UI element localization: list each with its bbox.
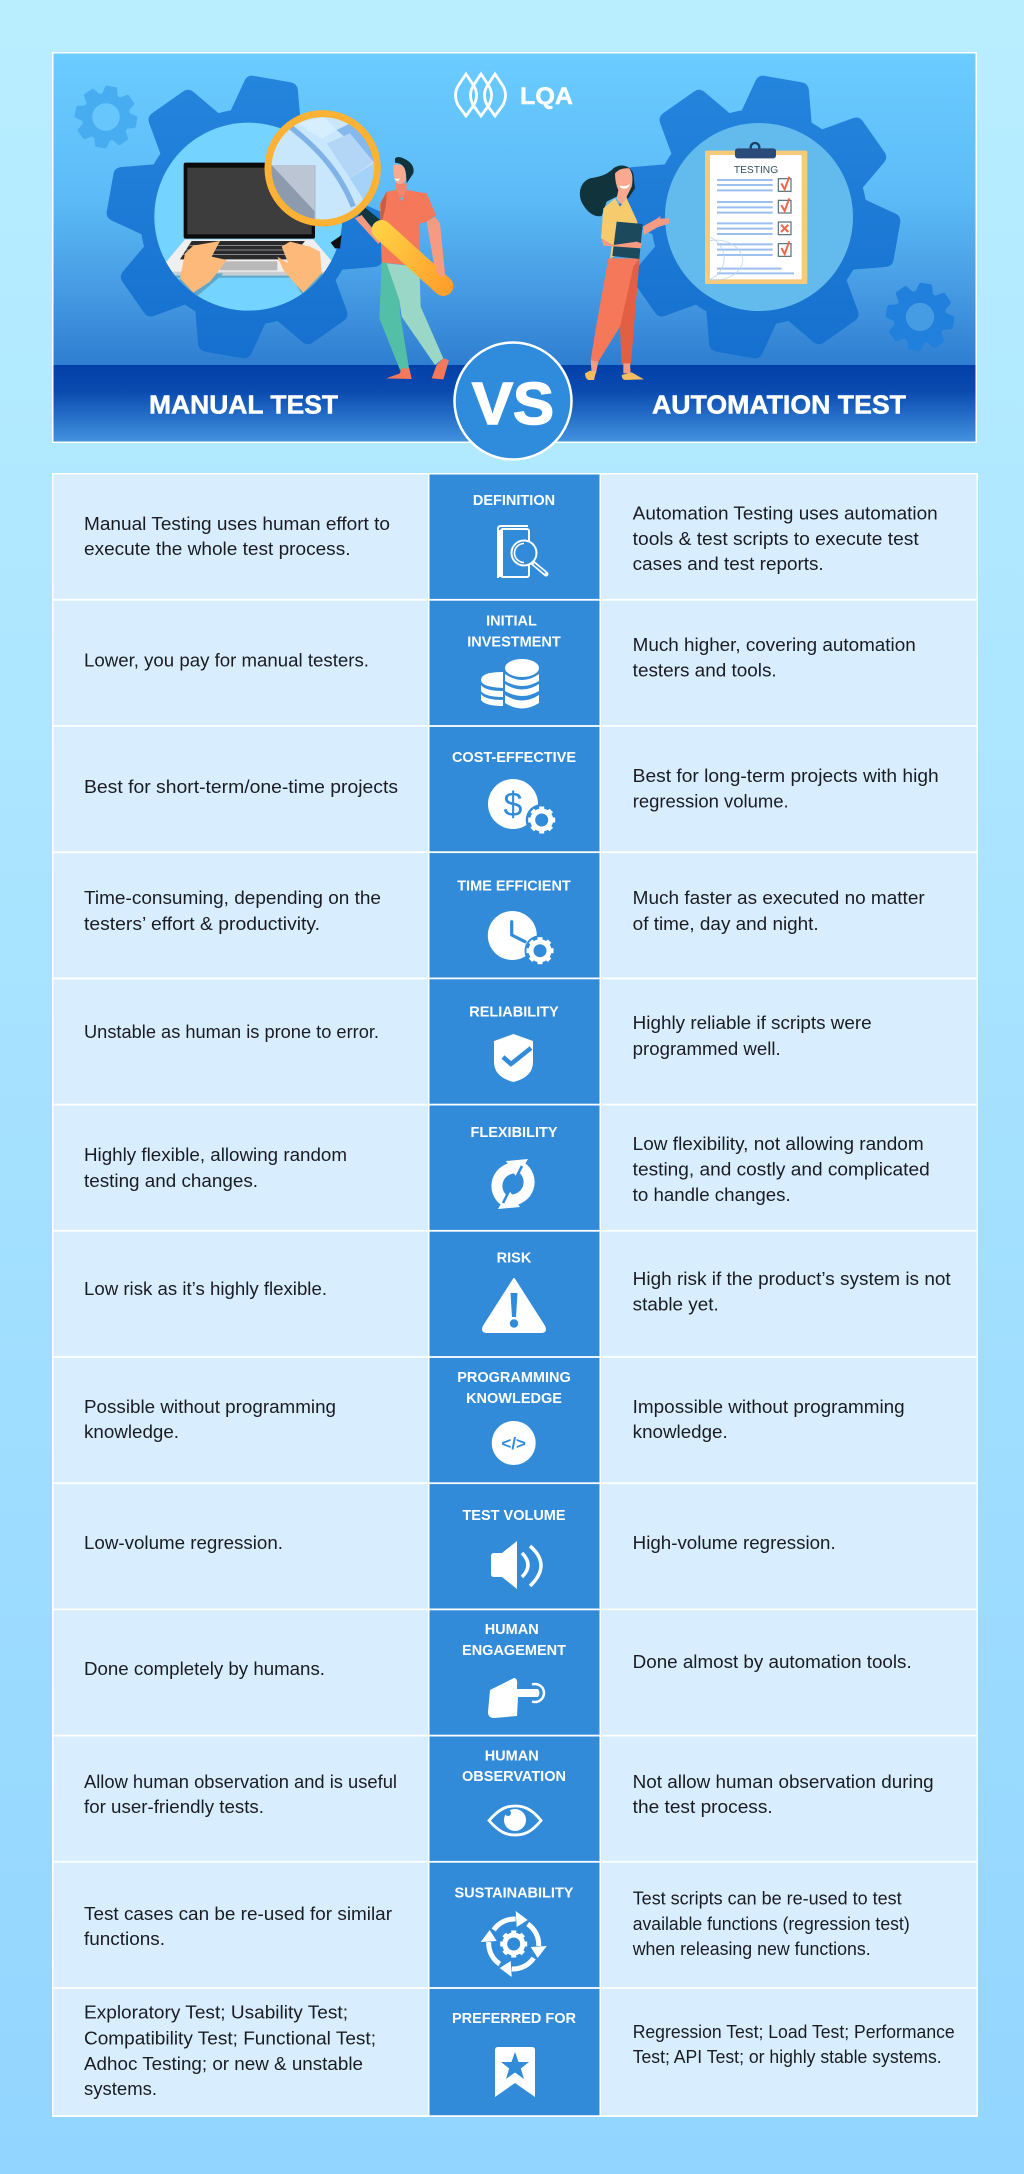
- manual text: Adhoc Testing; or new & unstable: [84, 2053, 363, 2074]
- heading: automation test: AUTOMATION TEST: [652, 390, 906, 420]
- header banner: [52, 52, 977, 460]
- automation text: [633, 1396, 905, 1442]
- automation text: regression volume.: [633, 790, 789, 812]
- label: DEFINITION: [473, 493, 555, 509]
- manual text: Manual Testing uses human effort to: [84, 513, 390, 534]
- manual text: Exploratory Test; Usability Test;: [84, 2002, 348, 2022]
- automation text: [633, 1133, 930, 1205]
- label: HUMAN: [485, 1749, 539, 1765]
- automation text: Much higher, covering automation: [633, 634, 916, 655]
- automation text: [633, 2021, 955, 2067]
- label: OBSERVATION: [462, 1769, 566, 1785]
- automation text: testing, and costly and complicated: [633, 1158, 930, 1180]
- magnifier lens: [267, 117, 375, 223]
- icon: large gear right: [619, 76, 900, 358]
- manual text: Compatibility Test; Functional Test;: [84, 2028, 376, 2048]
- manual text: Allow human observation and is useful: [84, 1771, 397, 1792]
- label: INVESTMENT: [467, 635, 561, 651]
- icon: dollar and gear: [488, 779, 558, 836]
- automation text: [633, 765, 939, 812]
- automation text: when releasing new functions.: [632, 1938, 871, 1959]
- logo: [456, 74, 573, 116]
- icon: eye: [489, 1806, 541, 1835]
- automation text: testers and tools.: [633, 660, 777, 680]
- manual text: for user-friendly tests.: [84, 1796, 264, 1817]
- icon: small gear left: [74, 86, 138, 148]
- illustration: laptop and magnifying glass: [154, 114, 449, 379]
- icon: clock and gear: [488, 911, 556, 966]
- automation text: programmed well.: [633, 1038, 781, 1059]
- row: human observation: [54, 1736, 976, 1861]
- automation text: Best for long-term projects with high: [633, 765, 939, 786]
- icon: book with magnifier: [498, 526, 546, 578]
- automation text: the test process.: [633, 1796, 773, 1817]
- row: risk: [54, 1232, 976, 1356]
- manual text: Highly flexible, allowing random: [84, 1144, 347, 1165]
- label: COST-EFFECTIVE: [452, 750, 576, 766]
- row: sustainability: [54, 1863, 976, 1987]
- icon: bookmark star: [495, 2047, 535, 2097]
- manual text: testers’ effort & productivity.: [84, 913, 320, 934]
- automation text: [633, 1771, 934, 1817]
- automation text: Highly reliable if scripts were: [633, 1012, 872, 1033]
- label: RISK: [497, 1251, 532, 1267]
- icon: cycle gear: [481, 1911, 547, 1977]
- icon: coin stacks: [481, 659, 539, 708]
- comparison table: [52, 473, 978, 2117]
- automation text: knowledge.: [633, 1421, 728, 1442]
- icon: dollar and gear: $: [504, 786, 523, 824]
- automation text: Impossible without programming: [633, 1396, 905, 1417]
- label: INITIAL: [486, 614, 537, 630]
- label: PROGRAMMING: [457, 1370, 571, 1386]
- logo: LQA: [520, 83, 573, 110]
- automation text: tools & test scripts to execute test: [633, 528, 919, 549]
- automation text: Done almost by automation tools.: [633, 1651, 912, 1672]
- row: reliability: [54, 979, 976, 1104]
- icon: code badge: [492, 1421, 536, 1465]
- manual text: [84, 1144, 347, 1191]
- automation text: High-volume regression.: [633, 1532, 836, 1553]
- clipboard: TESTING: [734, 165, 778, 176]
- label: KNOWLEDGE: [466, 1391, 562, 1407]
- manual text: [84, 1903, 392, 1949]
- manual text: [84, 1771, 397, 1817]
- icon: shield check: [494, 1034, 533, 1082]
- manual text: functions.: [84, 1928, 165, 1949]
- automation text: Automation Testing uses automation: [633, 502, 938, 524]
- illustration: clipboard and woman: [580, 123, 853, 380]
- man: [355, 157, 449, 379]
- icon: pressing hand: [488, 1678, 544, 1718]
- row: preferred for: [54, 1989, 976, 2115]
- label: ENGAGEMENT: [462, 1643, 566, 1659]
- automation text: [632, 1888, 910, 1959]
- automation text: High risk if the product’s system is not: [633, 1268, 951, 1289]
- manual text: Possible without programming: [84, 1396, 336, 1417]
- icon: speaker: [491, 1541, 541, 1589]
- row: definition: [54, 474, 976, 599]
- magnifier handle: [362, 212, 380, 227]
- icon: large gear left: [106, 76, 382, 358]
- manual text: [84, 2002, 376, 2099]
- manual text: Test cases can be re-used for similar: [84, 1903, 392, 1924]
- automation text: [633, 1268, 951, 1314]
- badge: VS: [454, 342, 572, 460]
- manual text: Unstable as human is prone to error.: [84, 1021, 379, 1042]
- automation text: Test; API Test; or highly stable systems.: [633, 2046, 942, 2067]
- label: SUSTAINABILITY: [455, 1886, 574, 1902]
- icon: warning triangle: [483, 1279, 545, 1332]
- row: flexibility: [54, 1106, 976, 1230]
- automation text: Regression Test; Load Test; Performance: [633, 2021, 955, 2042]
- badge: VS: VS: [472, 371, 554, 437]
- row: time efficient: [54, 853, 976, 978]
- automation text: Test scripts can be re-used to test: [633, 1888, 902, 1908]
- automation text: stable yet.: [633, 1294, 719, 1314]
- automation text: [633, 887, 925, 934]
- manual text: Best for short-term/one-time projects: [84, 776, 398, 797]
- label: FLEXIBILITY: [470, 1125, 558, 1141]
- manual text: Done completely by humans.: [84, 1658, 325, 1679]
- automation text: Low flexibility, not allowing random: [633, 1133, 924, 1154]
- automation text: [633, 1012, 872, 1059]
- row: programming knowledge: [54, 1358, 976, 1482]
- manual text: systems.: [84, 2078, 157, 2099]
- automation text: of time, day and night.: [633, 913, 819, 934]
- manual text: [84, 1396, 336, 1442]
- automation text: cases and test reports.: [633, 553, 824, 574]
- row: human engagement: [54, 1610, 976, 1735]
- label: TEST VOLUME: [462, 1508, 566, 1524]
- manual text: Low-volume regression.: [84, 1532, 283, 1553]
- icon: rotating arrows: [497, 1159, 529, 1209]
- label: RELIABILITY: [469, 1005, 559, 1021]
- manual text: execute the whole test process.: [84, 538, 350, 559]
- row: cost-effective: [54, 727, 976, 851]
- manual text: knowledge.: [84, 1421, 179, 1442]
- label: PREFERRED FOR: [452, 2011, 577, 2027]
- manual text: testing and changes.: [84, 1170, 258, 1191]
- icon: code badge: </>: [501, 1434, 526, 1453]
- clipboard: [705, 143, 807, 284]
- icon: small gear right: [886, 282, 954, 352]
- row: test volume: [54, 1484, 976, 1608]
- manual text: Lower, you pay for manual testers.: [84, 650, 369, 670]
- manual text: [84, 513, 390, 559]
- automation text: available functions (regression test): [633, 1913, 910, 1934]
- automation text: to handle changes.: [633, 1184, 791, 1205]
- manual text: Low risk as it’s highly flexible.: [84, 1278, 327, 1299]
- label: TIME EFFICIENT: [457, 879, 571, 895]
- manual text: Time-consuming, depending on the: [84, 887, 381, 908]
- automation text: [633, 634, 916, 680]
- woman: [580, 166, 669, 380]
- automation text: Not allow human observation during: [633, 1771, 934, 1792]
- automation text: Much faster as executed no matter: [633, 887, 925, 908]
- heading: manual test: MANUAL TEST: [149, 390, 338, 420]
- automation text: [633, 502, 938, 574]
- manual text: [84, 887, 381, 934]
- row: initial investment: [54, 601, 976, 725]
- label: HUMAN: [485, 1622, 539, 1638]
